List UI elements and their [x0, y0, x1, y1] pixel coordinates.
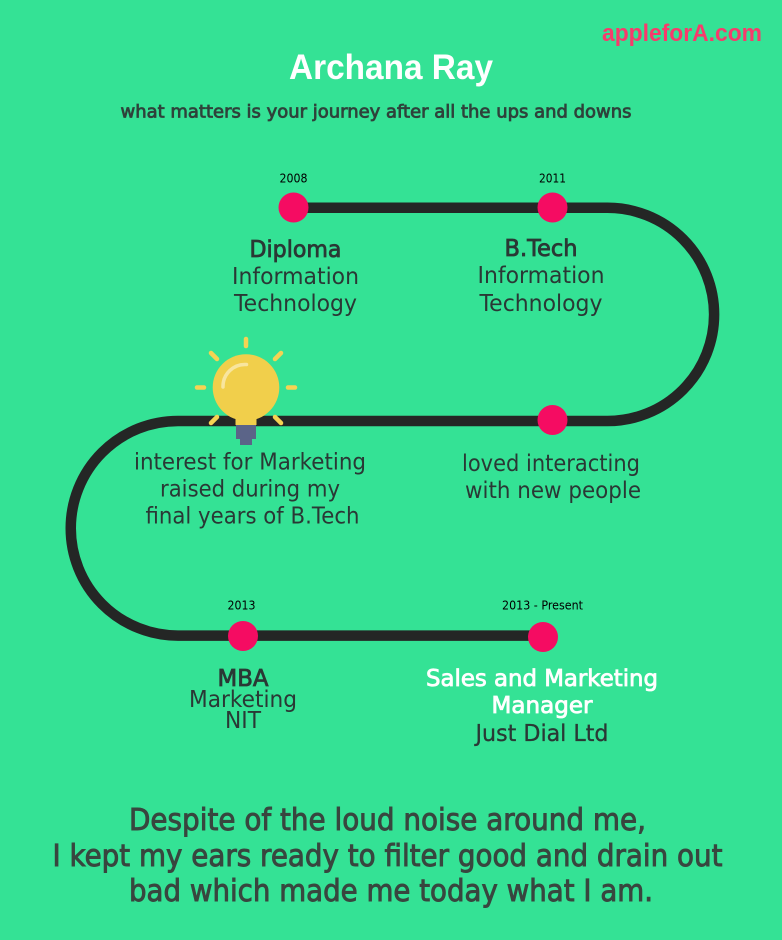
milestone: loved interacting: loved interacting — [462, 451, 640, 477]
title: Archana Ray — [289, 48, 494, 87]
milestone: loved interacting: with new people — [465, 478, 641, 504]
milestone: 2011: Information — [478, 263, 604, 289]
milestone: 2011: Technology — [479, 291, 602, 317]
milestone: 2011: 2011 — [539, 172, 566, 186]
closing quote: bad which made me today what I am. — [129, 874, 653, 909]
text: interest for marketing: final years of B.Tech — [146, 504, 360, 530]
closing quote — [52, 803, 723, 909]
milestone: 2013 - Present: Manager — [492, 693, 593, 719]
icon: light bulb — [197, 339, 295, 445]
milestone: 2013 MBA — [189, 598, 297, 734]
milestone: 2013 MBA: 2013 — [228, 598, 256, 612]
milestone: 2013 MBA: MBA — [218, 666, 269, 692]
milestone: 2008: Diploma — [250, 237, 342, 263]
timeline path — [71, 208, 714, 636]
milestone: 2011 — [478, 172, 604, 317]
milestone: 2011: B.Tech — [504, 236, 578, 262]
text: interest for marketing: raised during my — [160, 476, 340, 502]
milestone: loved interacting — [462, 405, 641, 504]
milestone: 2013 MBA: NIT — [225, 708, 262, 734]
milestone: 2008 — [232, 172, 359, 317]
text: interest for marketing: interest for Marketing — [134, 450, 366, 476]
closing quote: Despite of the loud noise around me, — [129, 803, 646, 838]
milestone: 2013 - Present: 2013 - Present — [502, 598, 583, 612]
milestone: 2013 MBA: Marketing — [189, 687, 297, 713]
milestone: 2013 - Present — [426, 598, 658, 747]
milestone: 2013 - Present: Just Dial Ltd — [474, 721, 608, 747]
closing quote: I kept my ears ready to filter good and drain out — [52, 839, 723, 874]
milestone: 2013 - Present: Sales and Marketing — [426, 666, 658, 692]
milestone: 2008: Information — [232, 264, 359, 290]
milestone: 2008: Technology — [233, 291, 357, 317]
milestone: 2008: 2008 — [280, 172, 308, 186]
text: interest for marketing — [134, 450, 366, 530]
subtitle: what matters is your journey after all the ups and downs — [120, 102, 632, 122]
brand watermark: appleforA.com — [602, 20, 762, 47]
